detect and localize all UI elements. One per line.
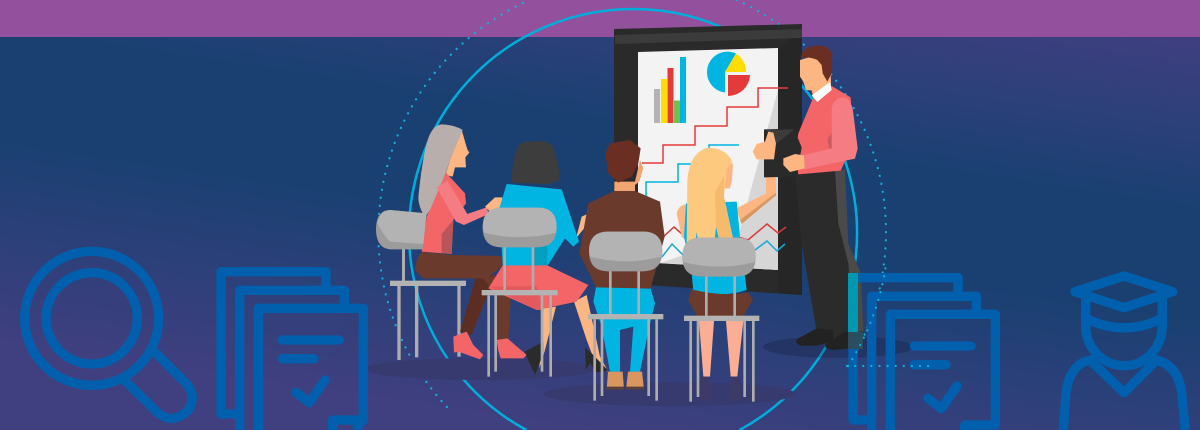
red zigzag line xyxy=(663,224,786,240)
dotted horizontal line xyxy=(847,365,932,367)
trousers seat xyxy=(415,252,504,278)
legs xyxy=(699,321,714,377)
far shoulder xyxy=(677,204,688,243)
seated blonde woman pointing xyxy=(677,129,805,402)
raised arm xyxy=(736,175,776,220)
blue top xyxy=(684,202,747,295)
tan shoes xyxy=(607,372,624,389)
floor shadow: presenter xyxy=(763,336,913,358)
chair back xyxy=(483,208,557,247)
neck and ear xyxy=(614,160,643,193)
presenter hand xyxy=(783,154,805,172)
cheek and neck xyxy=(724,163,733,188)
seated woman with black hair xyxy=(482,141,608,377)
far leg xyxy=(460,275,498,335)
chair leg and seat behind figure xyxy=(397,247,461,360)
chair back xyxy=(682,238,756,277)
pointing hand xyxy=(753,132,776,159)
presenter leg seen through document icon xyxy=(848,273,863,349)
coral skirt xyxy=(488,265,588,310)
brown jacket xyxy=(579,191,665,288)
brown hair xyxy=(605,140,641,183)
floor shadow: seated left xyxy=(365,358,595,380)
chair back xyxy=(589,232,662,271)
pink blouse xyxy=(422,173,466,254)
seated woman with grey hair xyxy=(376,124,527,360)
chair seat xyxy=(588,314,663,319)
chair seat xyxy=(390,281,466,286)
blue staircase line xyxy=(646,145,739,197)
dotted circle xyxy=(378,0,886,407)
presenter hair xyxy=(801,46,832,82)
icon: magnifying glass xyxy=(25,251,192,418)
blue trousers xyxy=(593,287,655,372)
black hair xyxy=(512,141,560,184)
flipchart paper xyxy=(638,48,778,270)
pink shoes xyxy=(453,332,483,359)
black heels xyxy=(525,342,543,375)
presenter shoes xyxy=(796,328,833,346)
chair seat xyxy=(482,290,558,295)
presentation board xyxy=(614,24,802,295)
chair frame xyxy=(487,246,552,377)
red staircase line xyxy=(642,88,788,163)
blonde hair xyxy=(687,148,735,247)
chair frame xyxy=(689,276,755,402)
icon: graduate xyxy=(1063,276,1185,430)
presenter sweater xyxy=(795,86,853,174)
heels xyxy=(700,377,712,400)
presenter head and neck xyxy=(800,55,831,97)
legs xyxy=(574,295,608,372)
chair seat xyxy=(684,316,759,321)
presenter collar xyxy=(812,82,832,102)
clipboard xyxy=(764,129,802,177)
grey hair xyxy=(418,124,463,217)
icon: stacked documents left xyxy=(221,272,363,430)
brown skirt xyxy=(688,289,753,316)
icon: stacked documents right xyxy=(853,278,995,430)
pie chart xyxy=(707,52,750,96)
hand xyxy=(576,214,587,238)
chair frame xyxy=(593,271,658,401)
blue zigzag line xyxy=(662,241,785,257)
seated man from behind xyxy=(579,140,665,401)
dotted circle tail over icons xyxy=(848,265,886,366)
blue blouse xyxy=(499,184,579,266)
floor shadow: seated right xyxy=(544,382,796,406)
cyan circle xyxy=(409,9,857,430)
presenter xyxy=(795,46,863,350)
chair back xyxy=(376,210,427,249)
hand xyxy=(485,197,502,212)
presenter trousers xyxy=(795,169,863,338)
skin face xyxy=(445,130,469,177)
top purple band xyxy=(0,0,1200,37)
bar chart xyxy=(654,57,686,123)
near leg xyxy=(483,275,511,340)
raised arm xyxy=(437,181,489,225)
